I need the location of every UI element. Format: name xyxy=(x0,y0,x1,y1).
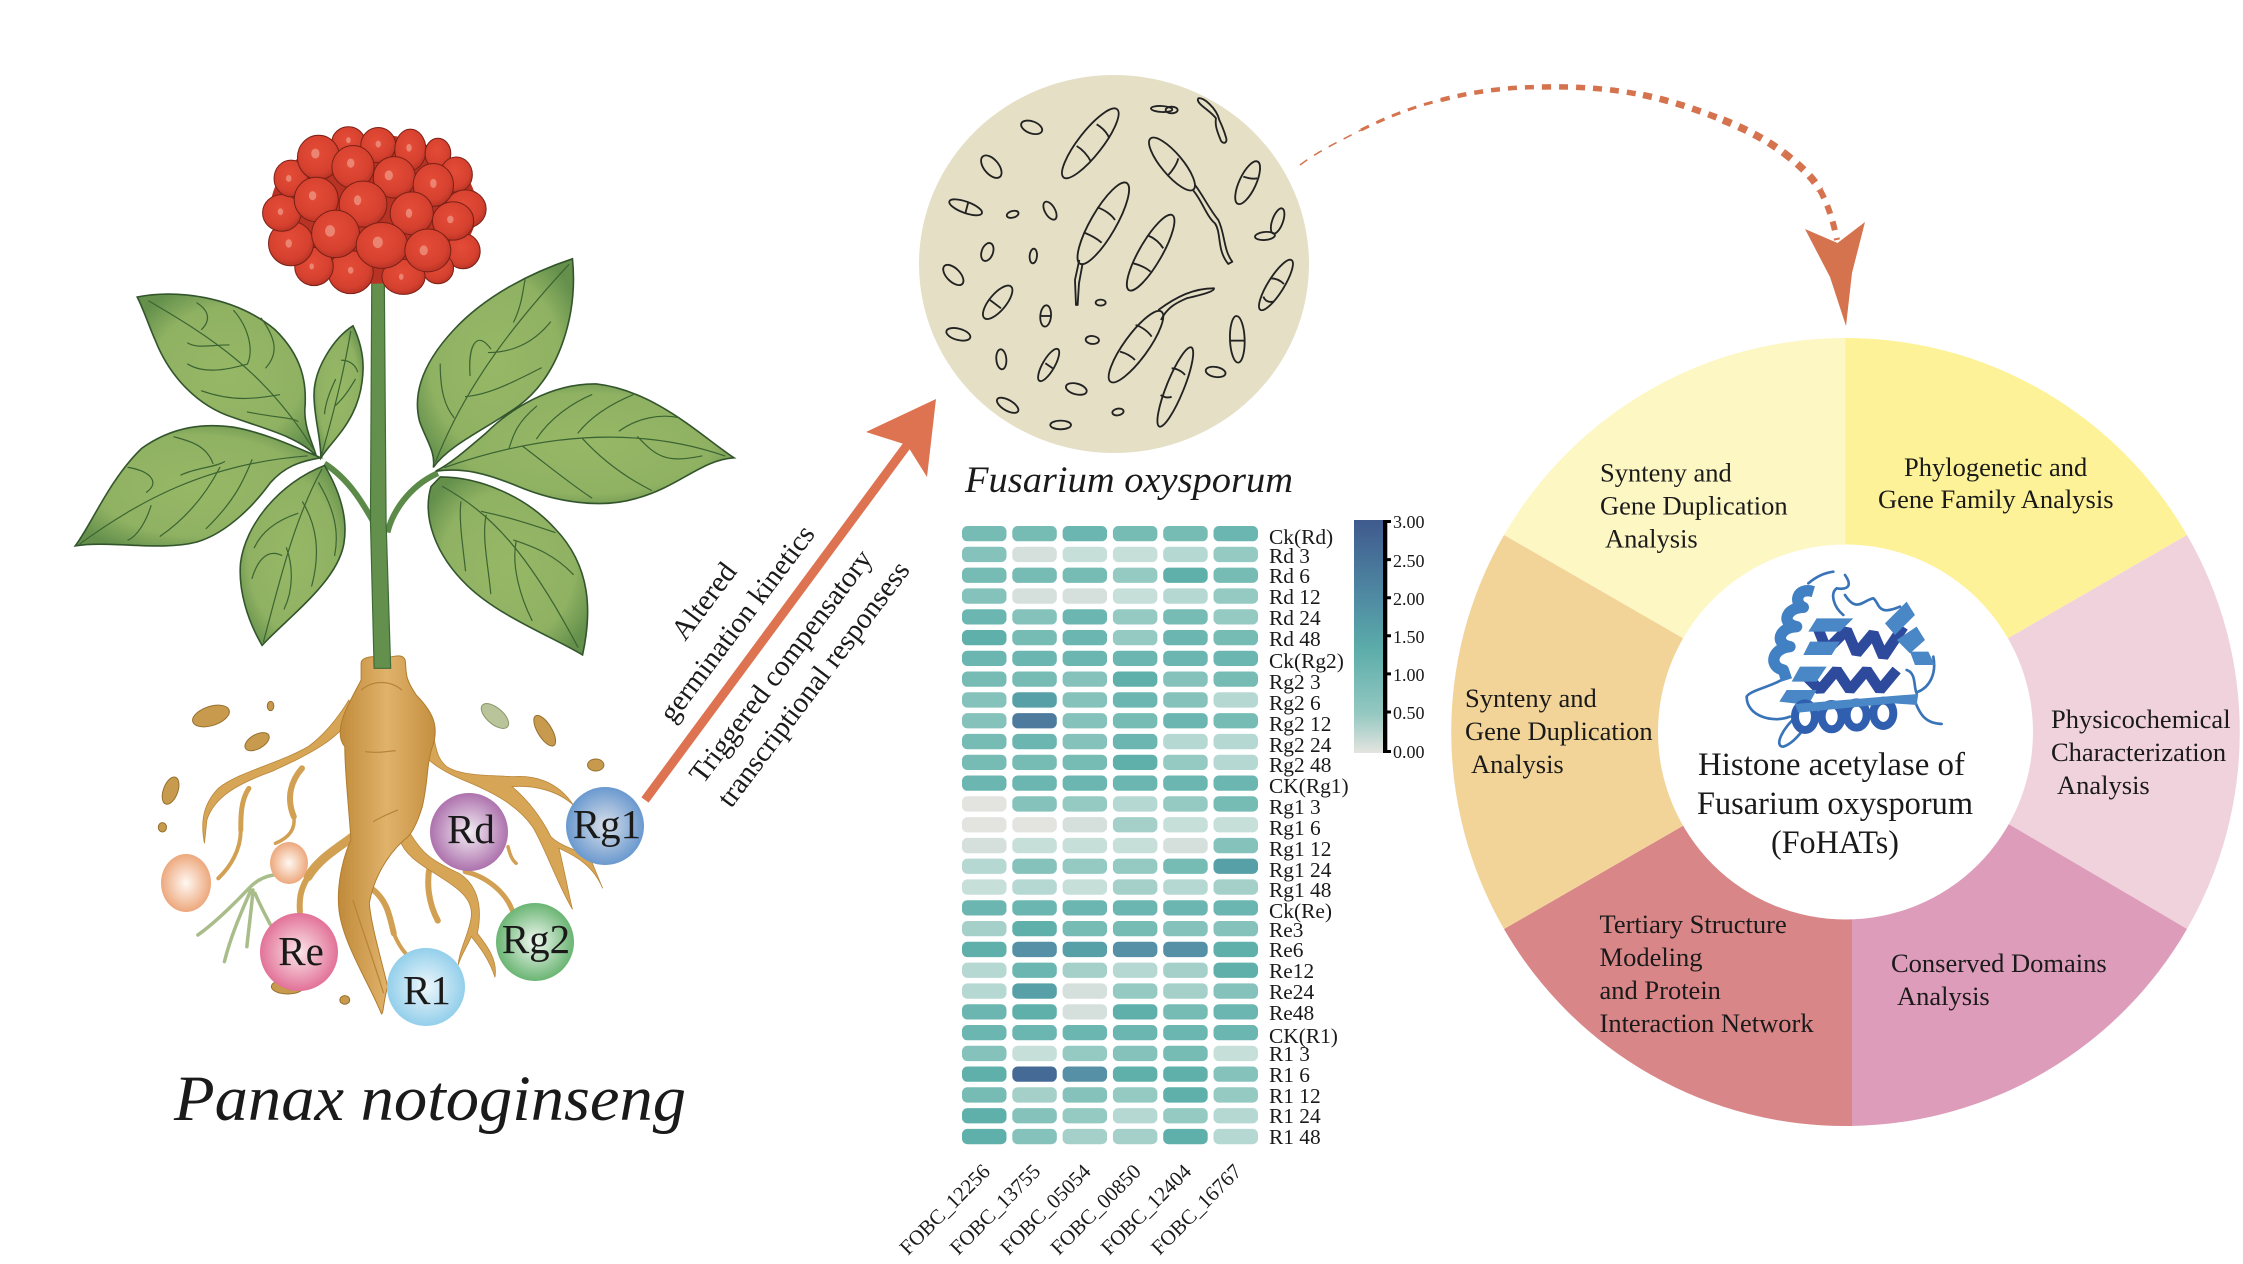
leaf: right large xyxy=(436,384,734,504)
heatmap colour scale legend: 1.50 xyxy=(1393,627,1424,647)
segment: tertiary structure xyxy=(1504,732,1852,1126)
heatmap row labels: Re6 xyxy=(1269,938,1304,962)
arrow labels: germination: Altered xyxy=(665,557,744,646)
arrow: ginseng to Fusarium xyxy=(645,399,936,800)
heatmap row labels: Re3 xyxy=(1269,918,1303,942)
centre disc xyxy=(1658,544,2033,920)
arrow labels: transcription: transcriptional responsess xyxy=(711,555,916,813)
heatmap row labels: Re48 xyxy=(1269,1001,1314,1025)
segment: tertiary structure: Tertiary Structure xyxy=(1600,909,1787,939)
heatmap row labels: R1 24 xyxy=(1269,1104,1321,1128)
leaf: lower left long xyxy=(75,426,321,546)
sphere: R1 xyxy=(387,948,465,1026)
segment: physicochemical: Analysis xyxy=(2057,770,2150,800)
centre title: Histone acetylase of xyxy=(1698,747,1965,783)
left segment label: Analysis xyxy=(1471,749,1564,779)
heatmap column labels: FOBC_16767 xyxy=(1146,1159,1246,1260)
sphere: R1: R1 xyxy=(403,967,451,1013)
red berry cluster xyxy=(263,127,486,294)
heatmap row labels: Rd 6 xyxy=(1269,564,1310,588)
spores xyxy=(940,98,1298,430)
ginseng plant illustration xyxy=(75,127,734,1026)
segment: phylogenetic xyxy=(1846,338,2187,732)
title: Panax notoginseng: Panax notoginseng xyxy=(173,1063,686,1135)
heatmap column labels: FOBC_13755 xyxy=(945,1159,1045,1260)
segment: synteny (left) xyxy=(1451,535,1846,929)
segment: tertiary structure: Modeling xyxy=(1600,942,1703,972)
sphere: Rg2: Rg2 xyxy=(502,916,570,962)
heatmap colour scale legend: 2.50 xyxy=(1393,551,1424,571)
heatmap row labels: Rd 24 xyxy=(1269,606,1321,630)
heatmap row labels: R1 12 xyxy=(1269,1084,1321,1108)
segment: conserved domains xyxy=(1852,732,2187,1126)
segment: synteny (top left): Gene Duplication xyxy=(1600,490,1788,520)
left segment label: Gene Duplication xyxy=(1465,716,1653,746)
heatmap row labels: CK(R1) xyxy=(1269,1024,1338,1048)
heatmap row labels: Rd 3 xyxy=(1269,544,1310,568)
icon: protein structure xyxy=(1747,572,1942,747)
heatmap column labels: FOBC_12404 xyxy=(1096,1159,1196,1260)
taproot and rootlets xyxy=(158,656,604,1014)
sphere: Rd xyxy=(430,793,508,871)
arrow labels: transcription: Triggered compensatory xyxy=(683,543,879,789)
heatmap column labels xyxy=(895,1159,1246,1260)
seeds xyxy=(158,700,604,1004)
heatmap row labels: Re24 xyxy=(1269,980,1314,1004)
segment: conserved domains: Conserved Domains xyxy=(1891,948,2107,978)
sphere: Re: Re xyxy=(278,928,324,974)
Fusarium spores circle xyxy=(919,75,1309,453)
heatmap row labels: Re12 xyxy=(1269,959,1314,983)
heatmap row labels: R1 48 xyxy=(1269,1125,1321,1149)
heatmap row labels: Rg2 12 xyxy=(1269,712,1331,736)
heatmap colour scale legend: 0.00 xyxy=(1393,742,1424,762)
leaf: upper left xyxy=(137,294,316,456)
heatmap colour scale legend: 2.00 xyxy=(1393,589,1424,609)
heatmap colour scale legend: 0.50 xyxy=(1393,703,1424,723)
heatmap row labels: Rg1 12 xyxy=(1269,837,1331,861)
segment: conserved domains: Analysis xyxy=(1897,981,1990,1011)
heatmap column labels: FOBC_05054 xyxy=(995,1159,1096,1260)
heatmap column labels: FOBC_12256 xyxy=(895,1159,995,1260)
heatmap row labels: R1 6 xyxy=(1269,1063,1310,1087)
sphere: Rd: Rd xyxy=(447,806,495,852)
leaf: small inner left xyxy=(314,326,363,458)
leaf: bottom left xyxy=(240,465,345,645)
label: Fusarium oxysporum: Fusarium oxysporum xyxy=(964,460,1293,501)
left segment label: Synteny and xyxy=(1465,683,1597,713)
dashed curved arrow xyxy=(1300,87,1865,326)
leaf: upper right xyxy=(417,259,573,467)
heatmap colour scale legend: 1.00 xyxy=(1393,665,1424,685)
heatmap row labels: Rd 48 xyxy=(1269,627,1321,651)
heatmap row labels: Ck(Rg2) xyxy=(1269,649,1344,673)
segment: synteny (top left) xyxy=(1504,338,1846,732)
sphere: Rg1: Rg1 xyxy=(573,801,641,847)
stem and petioles xyxy=(75,259,734,668)
heatmap colour scale legend: 3.00 xyxy=(1393,512,1424,532)
sphere: Re xyxy=(260,913,338,991)
heatmap row labels: Rg2 3 xyxy=(1269,670,1321,694)
segment: tertiary structure: and Protein xyxy=(1600,975,1721,1005)
segment: phylogenetic: Gene Family Analysis xyxy=(1878,484,2114,514)
segment: physicochemical xyxy=(1846,535,2240,929)
peach decorative spheres xyxy=(161,842,308,912)
heatmap row labels: Rg2 6 xyxy=(1269,691,1321,715)
heatmap row labels: Rg1 3 xyxy=(1269,795,1321,819)
segment: physicochemical: Physicochemical xyxy=(2051,704,2231,734)
heatmap colour scale legend xyxy=(1354,512,1424,762)
leaf: lower right xyxy=(428,477,588,655)
heatmap row labels: Rg2 24 xyxy=(1269,733,1332,757)
heatmap row labels: Ck(Re) xyxy=(1269,899,1332,923)
centre title: Fusarium oxysporum xyxy=(1697,786,1973,822)
segment: tertiary structure: Interaction Network xyxy=(1600,1008,1814,1038)
heatmap row labels: Rd 12 xyxy=(1269,585,1321,609)
heatmap row labels: Ck(Rd) xyxy=(1269,525,1333,549)
heatmap row labels: CK(Rg1) xyxy=(1269,774,1349,798)
heatmap row labels: Rg1 24 xyxy=(1269,858,1332,882)
centre title xyxy=(1697,747,1973,861)
heatmap row labels: Rg1 48 xyxy=(1269,878,1331,902)
heatmap row labels: Rg2 48 xyxy=(1269,753,1331,777)
analysis wheel xyxy=(1451,338,2240,1126)
arrow labels: germination: germination kinetics xyxy=(653,519,822,728)
heatmap row labels: R1 3 xyxy=(1269,1042,1310,1066)
sphere: Rg2 xyxy=(496,903,574,981)
sphere: Rg1 xyxy=(566,787,644,865)
heatmap row labels: Rg1 6 xyxy=(1269,816,1321,840)
centre title: (FoHATs) xyxy=(1771,825,1899,861)
heatmap xyxy=(962,526,1258,1144)
heatmap row labels xyxy=(1269,525,1349,1149)
segment: synteny (top left): Analysis xyxy=(1605,524,1698,554)
segment: synteny (top left): Synteny and xyxy=(1600,458,1732,488)
heatmap column labels: FOBC_00850 xyxy=(1045,1159,1146,1260)
segment: physicochemical: Characterization xyxy=(2051,737,2226,767)
segment: phylogenetic: Phylogenetic and xyxy=(1904,452,2087,482)
grass rootlets xyxy=(198,875,273,962)
